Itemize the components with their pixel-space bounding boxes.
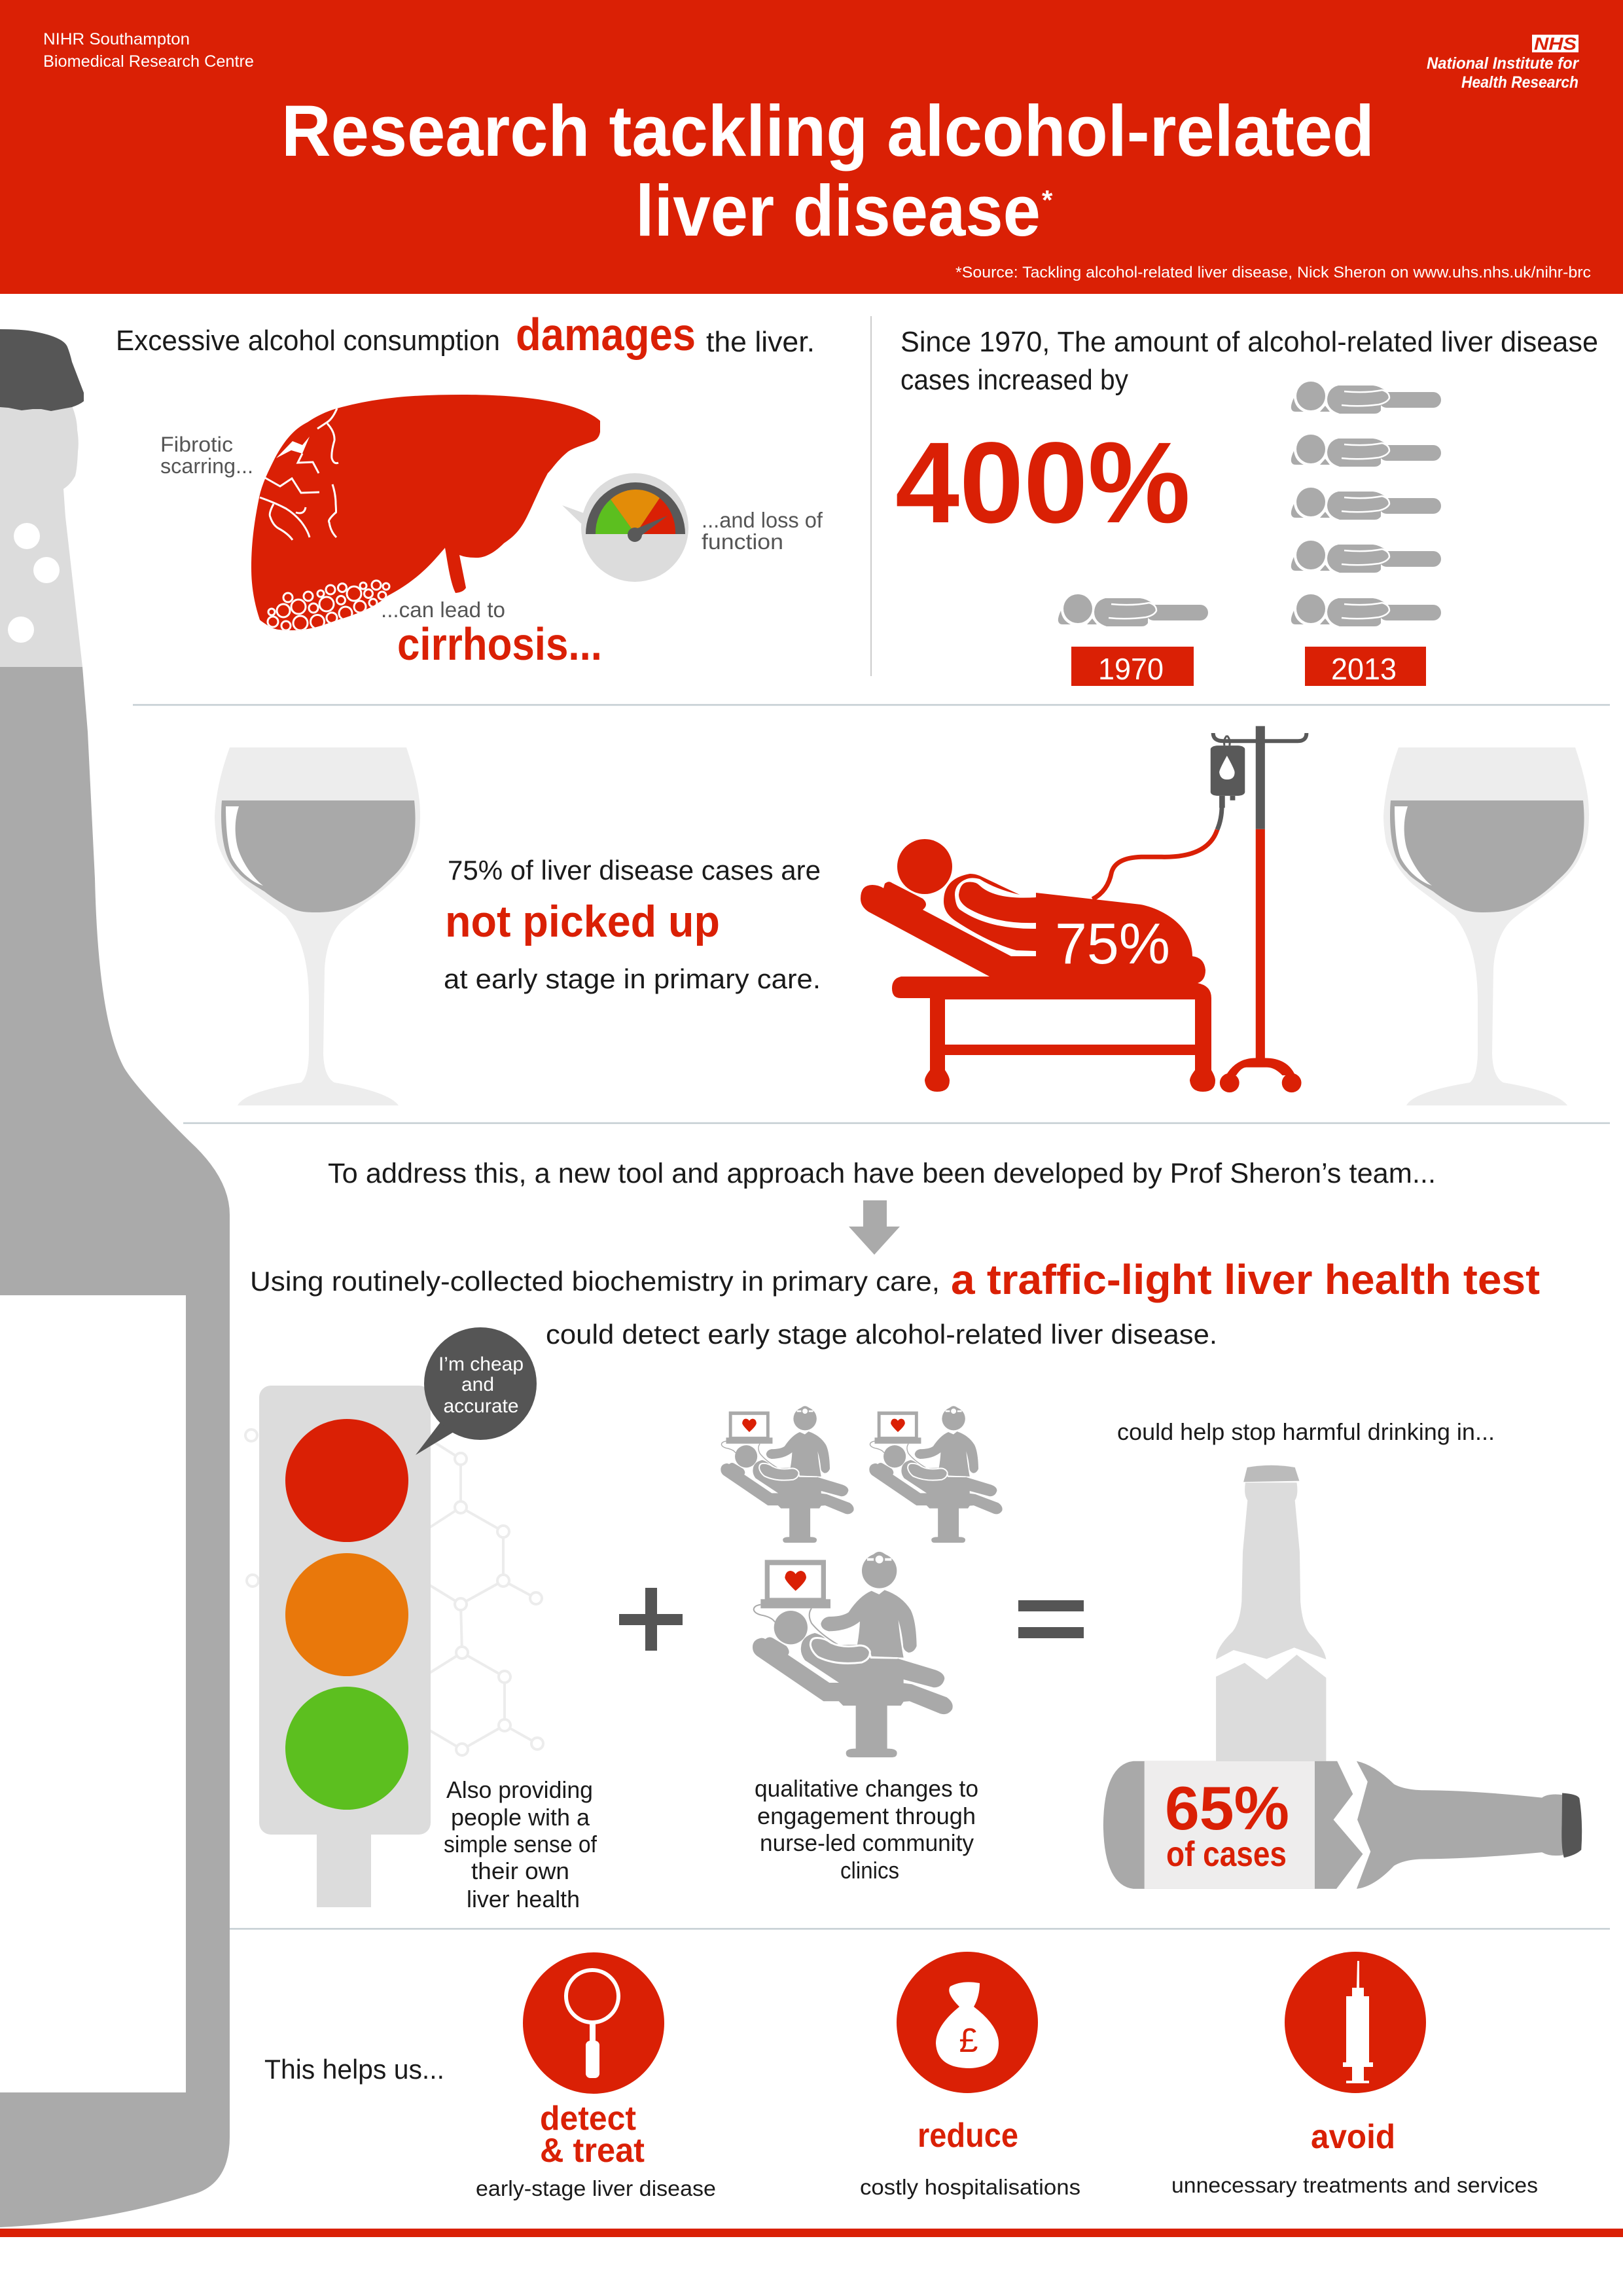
- label: loss of function: function: [702, 529, 783, 554]
- illustration: patient on bed with IV drip: 75%: [1055, 911, 1170, 976]
- text: qualitative changes: nurse-led community: [760, 1829, 974, 1856]
- year label 1970: [1071, 647, 1194, 686]
- increase heading: Since 1970, The amount of alcohol-related liver disease: [901, 326, 1598, 358]
- text: sense of liver health: liver health: [467, 1886, 580, 1912]
- text: traffic-light test: could detect early stage alcohol-related liver disease.: [546, 1319, 1217, 1350]
- label: avoid: avoid: [1311, 2118, 1395, 2156]
- icon: nurse clinic small right: [869, 1406, 1003, 1543]
- arrow: down: [849, 1200, 900, 1255]
- label: detect and treat: & treat: [540, 2132, 645, 2170]
- pictogram: 2013 patients: [1291, 382, 1441, 626]
- speech bubble: and: [461, 1374, 494, 1395]
- label: reduce: reduce: [918, 2117, 1018, 2155]
- text: sense of liver health: simple sense of: [444, 1831, 597, 1857]
- label: fibrotic scarring: [160, 433, 253, 478]
- speech bubble: [416, 1327, 537, 1455]
- NHS logo: NHS: [1534, 34, 1577, 54]
- organisation name: [43, 30, 254, 71]
- icon: nurse clinic small left: [721, 1406, 854, 1543]
- icon: money bag: [897, 1952, 1038, 2093]
- icon: right wine glass: [1383, 747, 1589, 1105]
- text: new tool intro: To address this, a new tool and approach have been developed by Prof Sheron’s team...: [328, 1158, 1436, 1189]
- label: loss of function: ...and loss of: [702, 508, 823, 532]
- header banner: [0, 0, 1623, 294]
- gauge: [562, 473, 688, 582]
- panel: 400% increase: [895, 326, 1598, 686]
- label: can lead to cirrhosis: ...can lead to: [381, 598, 505, 622]
- illustration: broken bottles 65%: 65%: [1165, 1774, 1289, 1842]
- NHS logo: National Institute for: [1427, 54, 1579, 73]
- label: detect and treat: [476, 2100, 716, 2200]
- footer bar: [0, 2229, 1623, 2237]
- equals sign: [1018, 1600, 1084, 1638]
- panel: detect and treat: [476, 1952, 716, 2200]
- source note: *Source: Tackling alcohol-related liver disease, Nick Sheron on www.uhs.nhs.uk/nihr-brc: [955, 264, 1591, 281]
- pictogram: 1970 patients: [1058, 594, 1208, 626]
- year label 2013: [1305, 647, 1426, 686]
- NHS logo: Health Research: [1461, 73, 1578, 92]
- speech bubble: accurate: [443, 1395, 519, 1417]
- organisation name: NIHR Southampton: [43, 30, 190, 48]
- text: qualitative changes: engagement through: [757, 1803, 976, 1829]
- label: avoid: unnecessary treatments and services: [1171, 2173, 1538, 2197]
- text: qualitative changes: [755, 1775, 978, 1884]
- illustration: broken bottles 65%: of cases: [1166, 1835, 1287, 1874]
- text: qualitative changes: qualitative changes to: [755, 1775, 978, 1802]
- molecule pattern: [245, 1429, 543, 1755]
- illustration: broken bottles 65%: [1103, 1465, 1582, 1889]
- text: sense of liver health: people with a: [451, 1804, 590, 1831]
- liver heading: [116, 309, 815, 360]
- label: avoid: [1171, 2118, 1538, 2197]
- label: can lead to cirrhosis: cirrhosis...: [397, 619, 602, 670]
- title: Research tackling alcohol-related: [281, 91, 1374, 171]
- icon: nurse clinic large: [753, 1552, 953, 1757]
- big number 400%: 400%: [895, 419, 1190, 547]
- label: fibrotic scarring: Fibrotic: [160, 433, 233, 456]
- illustration: patient on bed with IV drip: [861, 726, 1306, 1092]
- organisation name: Biomedical Research Centre: [43, 52, 254, 71]
- label: reduce: costly hospitalisations: [860, 2175, 1080, 2199]
- increase heading: [901, 326, 1598, 396]
- panel: liver damage: [116, 309, 823, 670]
- year label 1970: 1970: [1098, 652, 1164, 686]
- traffic light: [259, 1386, 431, 1907]
- icon: money bag: £: [959, 2022, 978, 2060]
- text: this helps us: This helps us...: [264, 2054, 444, 2085]
- text: sense of liver health: their own: [471, 1857, 569, 1884]
- title: liver disease: [635, 171, 1041, 251]
- title: [281, 91, 1374, 251]
- plus sign: [619, 1588, 683, 1651]
- text: not picked up: at early stage in primary care.: [444, 963, 821, 994]
- liver heading: damages: [516, 309, 696, 360]
- panel: avoid: [1171, 1952, 1538, 2197]
- liver illustration: [251, 395, 600, 630]
- text: qualitative changes: clinics: [840, 1857, 899, 1884]
- text: stop harmful drinking: could help stop harmful drinking in...: [1117, 1418, 1495, 1445]
- section dividers: [133, 705, 1610, 1929]
- liver heading: Excessive alcohol consumption: [116, 325, 500, 357]
- text: not picked up: [444, 855, 821, 994]
- label: detect and treat: detect: [540, 2100, 636, 2138]
- text: not picked up: not picked up: [445, 897, 720, 946]
- liver heading: the liver.: [706, 326, 815, 358]
- label: loss of function: [702, 508, 823, 554]
- label: can lead to cirrhosis: [381, 598, 602, 670]
- label: reduce: [860, 2117, 1080, 2199]
- large background bottle: [0, 329, 230, 2227]
- icon: left wine glass: [215, 747, 420, 1105]
- panel: reduce: [860, 1952, 1080, 2199]
- text: sense of liver health: [444, 1776, 597, 1912]
- increase heading: cases increased by: [901, 364, 1128, 396]
- title: *: [1042, 185, 1053, 215]
- label: detect and treat: early-stage liver disease: [476, 2176, 716, 2200]
- icon: syringe: [1285, 1952, 1426, 2093]
- label: fibrotic scarring: scarring...: [160, 454, 253, 478]
- text: traffic-light test: [250, 1256, 1540, 1350]
- icon: magnifying glass: [523, 1952, 664, 2094]
- text: traffic-light test: Using routinely-collected biochemistry in primary care,: [250, 1266, 940, 1297]
- speech bubble: I’m cheap: [438, 1354, 524, 1375]
- text: sense of liver health: Also providing: [446, 1776, 593, 1803]
- text: not picked up: 75% of liver disease cases are: [448, 855, 821, 886]
- NHS logo: [1427, 34, 1579, 92]
- text: traffic-light test: a traffic-light liver health test: [951, 1256, 1540, 1303]
- year label 2013: 2013: [1331, 652, 1397, 686]
